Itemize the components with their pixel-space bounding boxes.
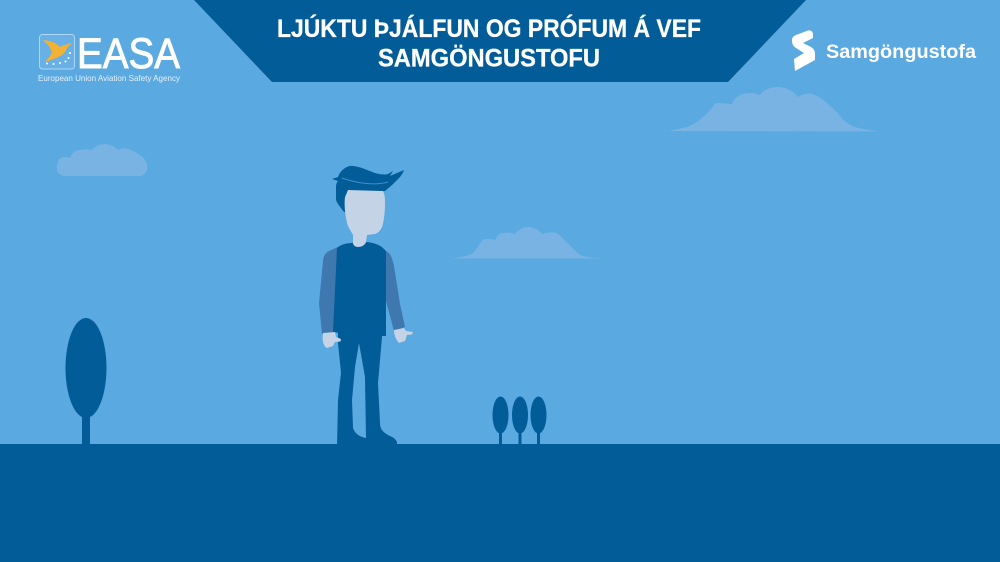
EASA logo — [38, 30, 181, 83]
Samgöngustofa logo: Samgöngustofa — [826, 42, 976, 63]
right hand — [394, 328, 413, 343]
icon: EASA bird — [40, 34, 74, 69]
ground — [0, 444, 1000, 562]
neck and face — [345, 190, 385, 247]
cloud: middle — [452, 227, 601, 258]
title banner: LJÚKTU ÞJÁLFUN OG PRÓFUM Á VEF — [277, 13, 701, 43]
hair highlight — [342, 178, 388, 184]
title banner — [194, 0, 806, 82]
icon: Samgöngustofa S mark — [792, 30, 815, 71]
legs — [337, 330, 397, 446]
left sleeve — [319, 247, 340, 334]
Samgöngustofa logo — [792, 30, 976, 71]
cloud: large upper right — [668, 87, 878, 132]
EASA logo: European Union Aviation Safety Agency — [38, 73, 181, 83]
EASA logo: EASA — [77, 30, 180, 78]
left hand — [323, 332, 341, 348]
title banner: SAMGÖNGUSTOFU — [378, 44, 600, 72]
person — [319, 166, 413, 446]
tree: large left — [66, 318, 106, 446]
hair — [332, 166, 404, 213]
trees: group of three — [492, 396, 546, 445]
torso — [333, 242, 386, 336]
cloud: upper left — [57, 144, 147, 176]
right sleeve — [383, 249, 405, 331]
